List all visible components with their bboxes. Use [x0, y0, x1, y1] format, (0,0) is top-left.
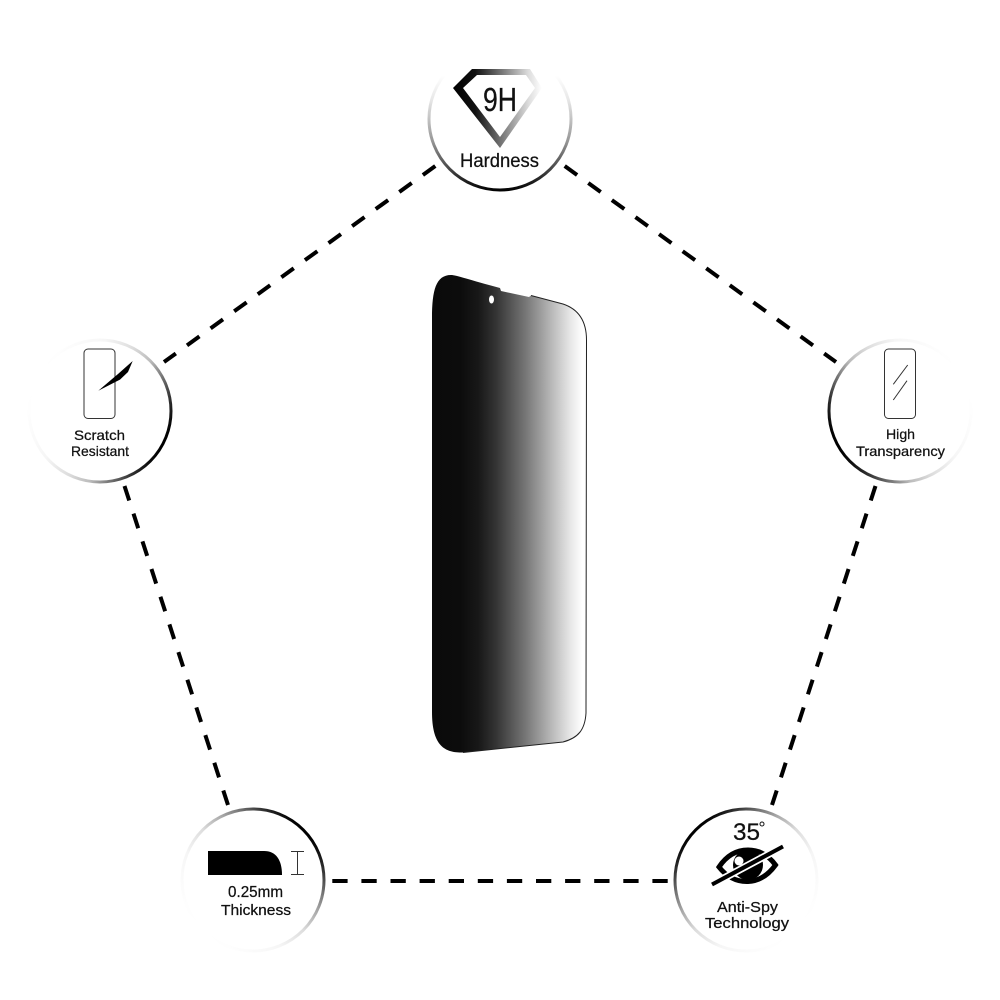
- Scratch Resistant label: [71, 427, 129, 459]
- Scratch Resistant label: Scratch: [74, 427, 125, 443]
- 9H label: 9H: [483, 81, 517, 118]
- 0.25mm Thickness label: Thickness: [221, 902, 291, 919]
- dashed connector: thickness to anti-spy: [332, 879, 668, 883]
- Hardness label: Hardness: [460, 151, 539, 172]
- feature: scratch resistant: [29, 340, 171, 482]
- icon: clear phone: [884, 349, 916, 418]
- camera hole: [489, 296, 494, 304]
- icon: crossed-out eye: [712, 846, 783, 884]
- feature: high transparency: [829, 340, 971, 482]
- High Transparency label: Transparency: [856, 443, 945, 459]
- High Transparency label: [856, 426, 945, 459]
- phone screen protector: [432, 275, 586, 753]
- dashed connector: scratch resistant to thickness: [124, 486, 228, 805]
- feature: 9H hardness: [429, 48, 571, 190]
- icon: height marker: [291, 852, 304, 874]
- Anti-Spy Technology label: Technology: [705, 915, 790, 932]
- 0.25mm Thickness label: [221, 884, 291, 919]
- 35 degree label: 35: [733, 819, 760, 846]
- icon: glass edge profile: [208, 851, 282, 875]
- High Transparency label: High: [886, 426, 915, 442]
- feature: anti-spy: [675, 809, 817, 951]
- dashed connector: high transparency to anti-spy: [772, 486, 876, 805]
- 0.25mm Thickness label: 0.25mm: [228, 884, 283, 901]
- icon: scratched phone: [84, 349, 133, 418]
- Anti-Spy Technology label: Anti-Spy: [717, 899, 779, 916]
- Anti-Spy Technology label: [705, 899, 790, 932]
- dashed connector: hardness to high transparency: [565, 166, 836, 362]
- Scratch Resistant label: Resistant: [71, 443, 129, 459]
- feature: thickness: [182, 809, 324, 951]
- icon: diamond: [453, 69, 542, 148]
- dashed connector: hardness to scratch resistant: [164, 166, 435, 362]
